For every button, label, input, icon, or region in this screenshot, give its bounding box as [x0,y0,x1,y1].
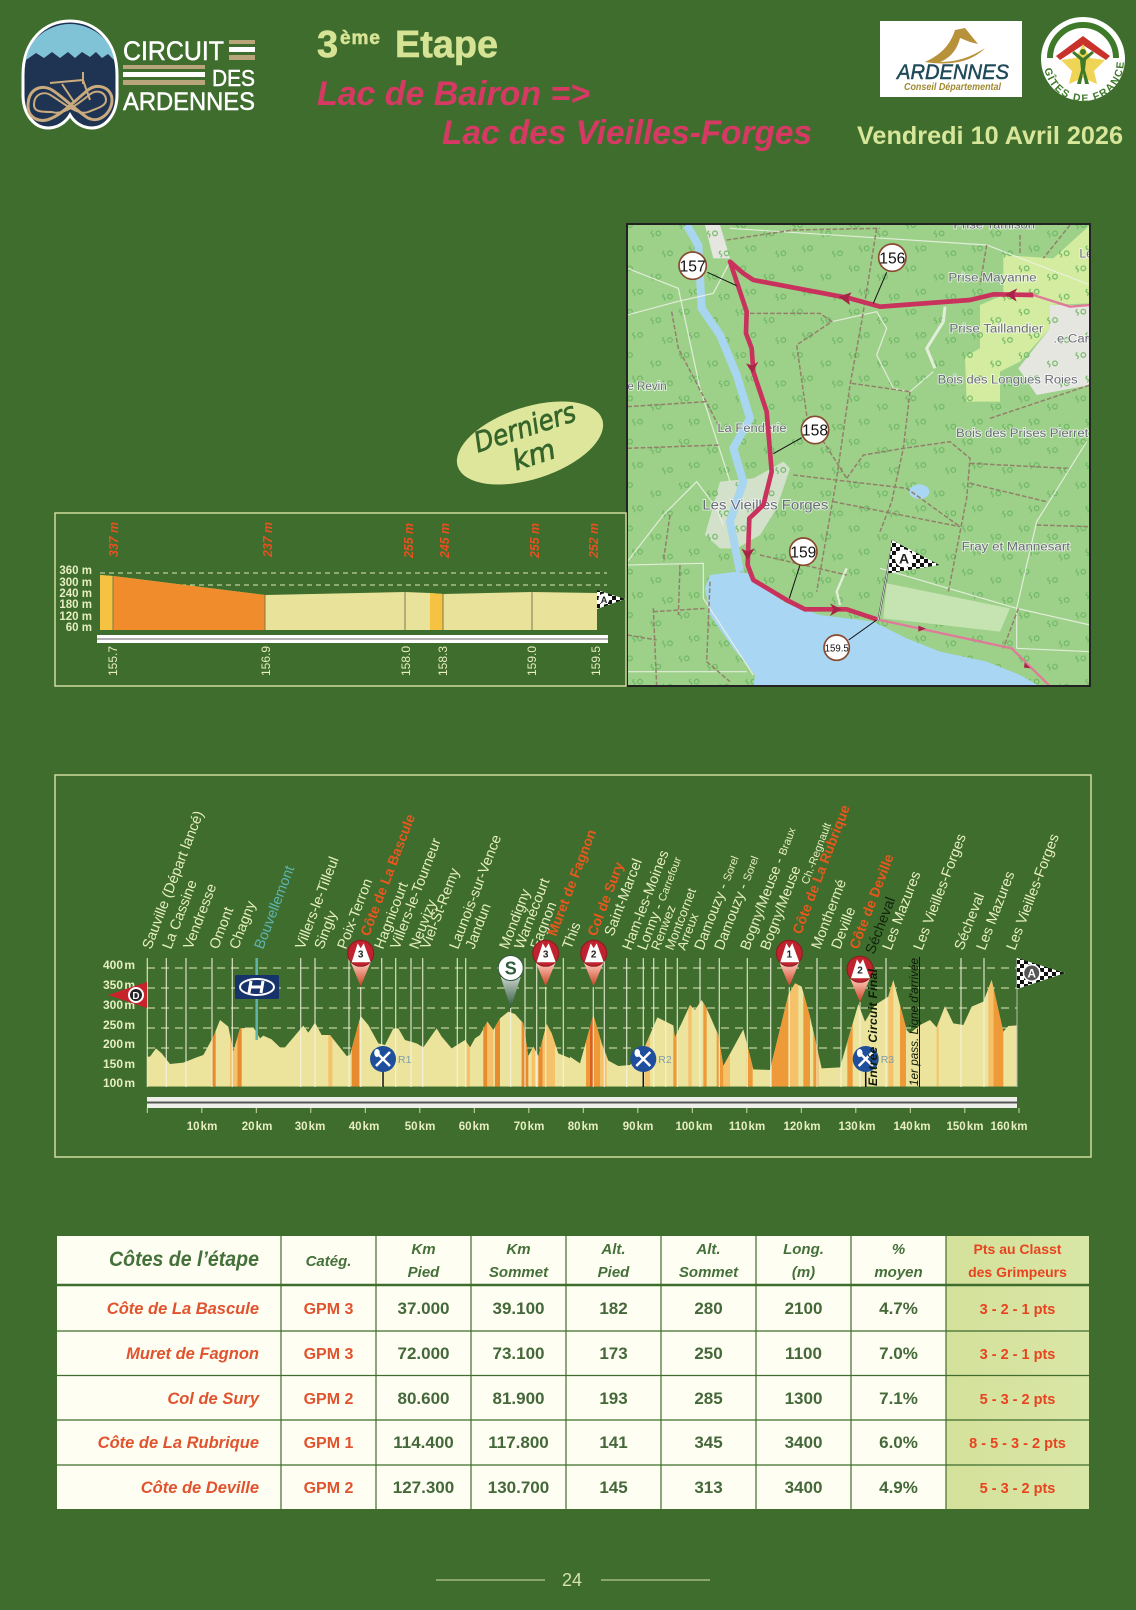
altitudes: 255 m [527,523,542,559]
logo: Circuit des Ardennes [23,21,255,128]
title: route start: Lac de Bairon => [317,75,590,113]
km labels: 90 km [623,1121,653,1133]
badge: Derniers km: Derniers [470,395,580,459]
y axis labels: 200 m [103,1037,135,1051]
y axis labels [103,958,135,1090]
row: Muret de Fagnon [126,1344,1055,1363]
row: Côte de Deville: 313 [694,1478,723,1497]
map place names: Prise Tamison [953,217,1035,231]
map river [687,225,750,572]
altitudes: 337 m [106,522,121,557]
km marker 159 [790,538,817,565]
town labels: Mondigny [497,886,535,951]
km labels: 159.5 [589,646,603,676]
dashed guides [100,573,607,585]
town labels: Côte de Deville [846,851,897,951]
finish flag: A [1027,966,1036,980]
km labels: 70 km [514,1121,544,1133]
row: Col de Sury: 285 [694,1389,723,1408]
km labels: 156.9 [259,646,273,676]
km marker 156: 156 [879,250,906,267]
table header: (m) [792,1264,815,1281]
map border [627,224,1090,686]
town labels: Les Mazures [974,869,1018,952]
table header [109,1241,1067,1281]
altitudes [106,522,601,559]
map place names: .e Carr [1053,332,1093,346]
km marker 159.5 [824,635,849,660]
town labels: Bogny/Meuse - Braux [738,825,800,952]
logo: Gîtes de France [1041,17,1125,102]
km labels: 100 km [675,1121,713,1133]
altitudes: 245 m [437,523,452,559]
row: Côte de La Bascule: 3 - 2 - 1 pts [980,1302,1055,1318]
km labels: 80 km [568,1121,598,1133]
row: Col de Sury: GPM 2 [304,1391,353,1408]
town labels: Les Vieilles-Forges [911,832,970,952]
town labels: Damouzy - Sorel [692,854,743,952]
GPM marker: Côte de Deville [847,956,873,1002]
row: Col de Sury: 81.900 [492,1389,544,1408]
town labels: Arreux [674,910,702,952]
km labels: 159.0 [525,646,539,676]
map place names: Prise Taillandier [949,322,1043,336]
row: Côte de La Rubrique: GPM 1 [304,1435,353,1452]
logo: Ardennes Conseil Départemental: ARDENNES [895,61,1009,84]
km labels: 60 km [459,1121,489,1133]
logo: Ardennes Conseil Départemental [880,21,1022,97]
leader lines [707,272,887,640]
map grey areas [705,225,1090,548]
town labels: Les Mazures [880,869,924,952]
row: Côte de La Rubrique: 114.400 [393,1433,454,1452]
km marker 157 [679,252,706,279]
title: stage number: ème [340,28,380,49]
start flag [108,982,147,1008]
y axis labels: 350 m [103,978,135,992]
row: Côte de Deville [141,1478,1055,1497]
town labels: Chagny [227,898,260,951]
km labels: 140 km [893,1121,931,1133]
feed zone R3 [853,1046,894,1087]
row: Côte de La Rubrique: 6.0% [879,1433,918,1452]
table header: % [892,1241,905,1258]
map place names: Fray et Mannesart [962,539,1071,553]
row: Côte de La Bascule: 280 [694,1299,723,1318]
row: Côte de La Bascule: 182 [599,1299,628,1318]
map tree texture [627,224,1090,686]
town labels: Fagnon [528,900,560,951]
row: Côte de La Rubrique: 141 [599,1433,628,1452]
town labels: Warnécourt [512,876,553,951]
feed zone R1 [370,1046,412,1087]
finish flag on map [878,540,939,620]
km labels: 120 km [783,1121,821,1133]
Hyundai sponsor box [235,975,279,999]
y axis labels: 180 m [59,599,92,611]
town labels: Poix-Terron [335,876,376,951]
row: Côte de La Bascule: 39.100 [492,1299,544,1318]
town labels: Launois-sur-Vence [447,833,505,951]
row: Côte de La Rubrique: Côte de La Rubrique [98,1434,259,1452]
row: Col de Sury: 5 - 3 - 2 pts [980,1392,1055,1408]
table header: Pied [598,1264,630,1281]
km labels: 10 km [187,1121,217,1133]
row: Col de Sury: Col de Sury [167,1390,260,1408]
km labels [106,646,603,676]
table background [57,1236,1089,1509]
y axis labels: 300 m [59,577,92,589]
GPM marker: Côte de La Rubrique: 1 [787,949,793,960]
row: Côte de Deville: 130.700 [488,1478,549,1497]
table header: Km [506,1241,531,1258]
yellow sections [100,575,443,630]
row: Muret de Fagnon: 7.0% [879,1344,918,1363]
table header: Sommet [679,1264,739,1281]
town labels: Ch.-Regnault [800,821,834,886]
town labels: Neuvizy [407,897,440,951]
town labels: Deville [829,905,859,951]
town labels: Sécheval [863,895,899,956]
km labels: 50 km [405,1121,435,1133]
y axis labels: 250 m [103,1018,135,1032]
town labels: La Cassine [160,878,201,951]
elevation silhouette left [148,1012,570,1087]
profile area [100,575,597,630]
y axis labels: 120 m [59,611,92,623]
elevation silhouette right [568,973,1018,1088]
km labels: 158.0 [399,646,413,676]
GPM marker: Côte de La Bascule: 3 [358,949,364,960]
map light fields [965,225,1090,402]
badge: Derniers km: km [508,432,560,477]
GPM marker: Muret de Fagnon: 3 [543,949,549,960]
town labels: Hagnicourt [372,880,412,951]
km labels: 158.3 [436,646,450,676]
GPM marker: Côte de Deville: 2 [857,965,863,976]
town labels: Jandun [463,901,495,951]
note: first passage finish line: 1er pass. Ligne d'arrivée [907,958,921,1086]
row: Côte de La Rubrique: 117.800 [488,1433,549,1452]
logo: Circuit des Ardennes: CIRCUIT [123,36,224,66]
km marker 159.5: 159.5 [825,644,849,655]
row: Côte de La Bascule: 2100 [785,1299,822,1318]
route: thin continuation [877,295,1090,686]
town labels: Omont [207,905,237,951]
y axis labels: 150 m [103,1057,135,1071]
town labels: Montcornet [662,886,699,952]
y axis labels: 360 m [59,565,92,577]
row: Côte de Deville: 145 [599,1478,628,1497]
town labels: Monthermé [809,877,850,951]
map place names: e Revin [627,379,667,393]
town labels: Singly [312,908,341,951]
y axis labels: 300 m [103,998,135,1012]
row: Côte de La Bascule [107,1299,1055,1318]
town labels: Lonny - Carrefour [635,854,685,952]
GPM marker: Col de Sury: 2 [591,949,597,960]
feed zone R1: R1 [398,1054,412,1066]
table header: Pied [408,1264,440,1281]
town labels: Villers-le-Tilleul [293,855,343,951]
table header: moyen [874,1264,923,1281]
km labels: 110 km [729,1121,765,1133]
km marker 159: 159 [790,544,816,561]
map place names: Bois des Longues Roies [938,373,1078,387]
table grid [57,1236,1089,1509]
logo: Gîtes de France: GÎTES DE FRANCE [1045,62,1124,102]
km labels: 160 km [990,1121,1028,1133]
row: Col de Sury: 193 [599,1389,628,1408]
town labels: Villers-le-Tourneur [388,836,445,951]
town labels: Damouzy - Sorel [712,854,763,952]
panel: last kilometres profile [55,513,626,686]
row: Côte de Deville: 127.300 [393,1478,454,1497]
logo: Ardennes Conseil Départemental: Conseil Départemental [904,82,1001,93]
town labels: Bogny/Meuse [758,864,805,952]
start flag: D [132,991,140,1002]
map place names [627,217,1093,553]
town labels: Côte de La Rubrique [789,802,853,936]
km labels: 40 km [349,1121,379,1133]
map roads [627,228,1090,675]
table header: Alt. [600,1241,626,1258]
feed zone R2: R2 [658,1054,672,1066]
altitudes: 252 m [586,523,601,559]
map place names: Les Vieilles Forges [702,496,828,512]
km marker 156 [879,244,906,271]
sprint line [510,1008,512,1087]
km marker 157: 157 [680,258,706,275]
badge: Derniers km [447,385,613,501]
feed zone R2 [630,1046,672,1087]
scale strip [147,1097,1017,1108]
table header: Km [411,1241,436,1258]
y axis labels: 240 m [59,588,92,600]
altitudes: 255 m [401,523,416,559]
town labels: Sauville (Départ lancé) [140,809,207,951]
row: Col de Sury [167,1389,1055,1408]
row: Col de Sury: 80.600 [398,1389,450,1408]
finish flag small: A [601,595,608,605]
town labels: Viel-St-Remy [418,866,464,951]
scale strip [97,635,608,643]
panel: stage profile [55,775,1091,1157]
steep section [113,576,265,630]
row: Côte de La Bascule: 37.000 [398,1299,450,1318]
km marker 158 [801,416,829,444]
km marker 158: 158 [802,423,828,440]
row: Côte de La Rubrique: 345 [694,1433,723,1452]
dashed guides [147,968,1017,1048]
y axis labels: 400 m [103,958,135,972]
map place names: Le [1079,246,1093,260]
row: Côte de La Rubrique: 3400 [785,1433,822,1452]
sprint marker: S [505,958,517,978]
Bouvellemont teal line [255,958,258,1040]
row: Muret de Fagnon: 173 [599,1344,628,1363]
title: route finish: Lac des Vieilles-Forges [442,114,812,152]
y axis labels: 60 m [66,622,92,634]
town labels: Côte de La Bascule [357,812,418,938]
km labels: 30 km [295,1121,325,1133]
town labels: Saint-Marcel [602,857,646,938]
finish flag small [597,590,625,609]
km labels: 155.7 [106,646,120,676]
map lake [705,572,1040,686]
feed zone R3: R3 [881,1054,894,1066]
table header: Côtes de l’étape [109,1248,259,1271]
row: Côte de Deville: 5 - 3 - 2 pts [980,1481,1055,1497]
row: Côte de La Rubrique: 8 - 5 - 3 - 2 pts [969,1436,1066,1452]
map clearing [883,583,1010,632]
town labels: Col de Sury [584,860,627,938]
town labels: Vendresse [181,882,220,951]
row: Côte de La Bascule: 4.7% [879,1299,918,1318]
map pond [909,484,929,499]
row: Côte de Deville: GPM 2 [304,1480,353,1497]
map place names: La Fenderie [717,421,787,435]
table header: Long. [783,1241,824,1258]
GPM marker: Muret de Fagnon [533,940,559,986]
row: Col de Sury: 7.1% [879,1389,918,1408]
row: Côte de Deville: 4.9% [879,1478,918,1497]
table header: des Grimpeurs [968,1264,1067,1280]
y axis labels [59,565,92,634]
row: Muret de Fagnon: 73.100 [492,1344,544,1363]
town labels: Ham-les-Moines [620,848,673,952]
logo: Circuit des Ardennes: ARDENNES [123,88,255,116]
GPM marker: Côte de La Bascule [348,940,374,986]
row: Muret de Fagnon: 1100 [785,1344,822,1363]
map place names: Bois des Prises Pierret [956,426,1089,440]
row: Côte de Deville: 3400 [785,1478,822,1497]
route arrows [741,288,1031,668]
title: stage number [317,24,498,66]
table header: Pts au Classt [974,1241,1062,1257]
table header: Sommet [489,1264,549,1281]
page number: 24 [562,1570,582,1590]
town labels: Renwez [648,903,679,952]
row: Muret de Fagnon: GPM 3 [304,1346,353,1363]
sprint marker [498,956,523,1008]
town labels: Les Vieilles-Forges [1004,832,1063,952]
km labels [187,1121,1028,1133]
table header: Alt. [695,1241,721,1258]
finish flag on map: A [899,550,909,566]
row: Muret de Fagnon: Muret de Fagnon [126,1345,259,1363]
title: stage number: Etape [395,24,498,66]
map base forest [627,224,1090,686]
points column shading [946,1236,1089,1509]
town labels [140,802,1063,956]
row: Côte de La Bascule: Côte de La Bascule [107,1300,259,1318]
km labels: 130 km [838,1121,876,1133]
GPM marker: Côte de La Rubrique [776,940,802,986]
GPM marker: Col de Sury [581,940,607,986]
altitudes: 237 m [260,522,275,558]
km labels: 20 km [242,1121,272,1133]
row: Muret de Fagnon: 250 [694,1344,723,1363]
note: final circuit entry: Entrée Circuit Final [866,968,880,1086]
row: Côte de La Rubrique [98,1433,1066,1452]
date: Vendredi 10 Avril 2026 [857,122,1123,150]
town labels: This [560,920,585,951]
town labels: Sécheval [952,891,988,952]
table: climbs [57,1236,1089,1509]
town labels: Bouvellemont [252,864,298,951]
map forest tracks [627,225,1090,686]
table header: Catég. [306,1253,351,1270]
kilometre separators [113,576,532,630]
map place names: Prise Mayanne [948,271,1037,285]
row: Muret de Fagnon: 72.000 [398,1344,450,1363]
km labels: 150 km [946,1121,984,1133]
map panel [627,217,1093,686]
finish flag [1017,958,1065,1087]
title: stage number: 3 [317,24,338,66]
town labels: Muret de Fagnon [544,827,599,938]
y axis labels: 100 m [103,1076,135,1090]
location ticks [147,958,984,1087]
row: Côte de La Bascule: GPM 3 [304,1301,353,1318]
row: Côte de Deville: Côte de Deville [141,1479,259,1497]
logo: Circuit des Ardennes: DES [212,65,255,91]
scale ticks [147,1108,1019,1113]
route: thick red line [730,262,1033,619]
row: Col de Sury: 1300 [785,1389,822,1408]
row: Muret de Fagnon: 3 - 2 - 1 pts [980,1347,1055,1363]
